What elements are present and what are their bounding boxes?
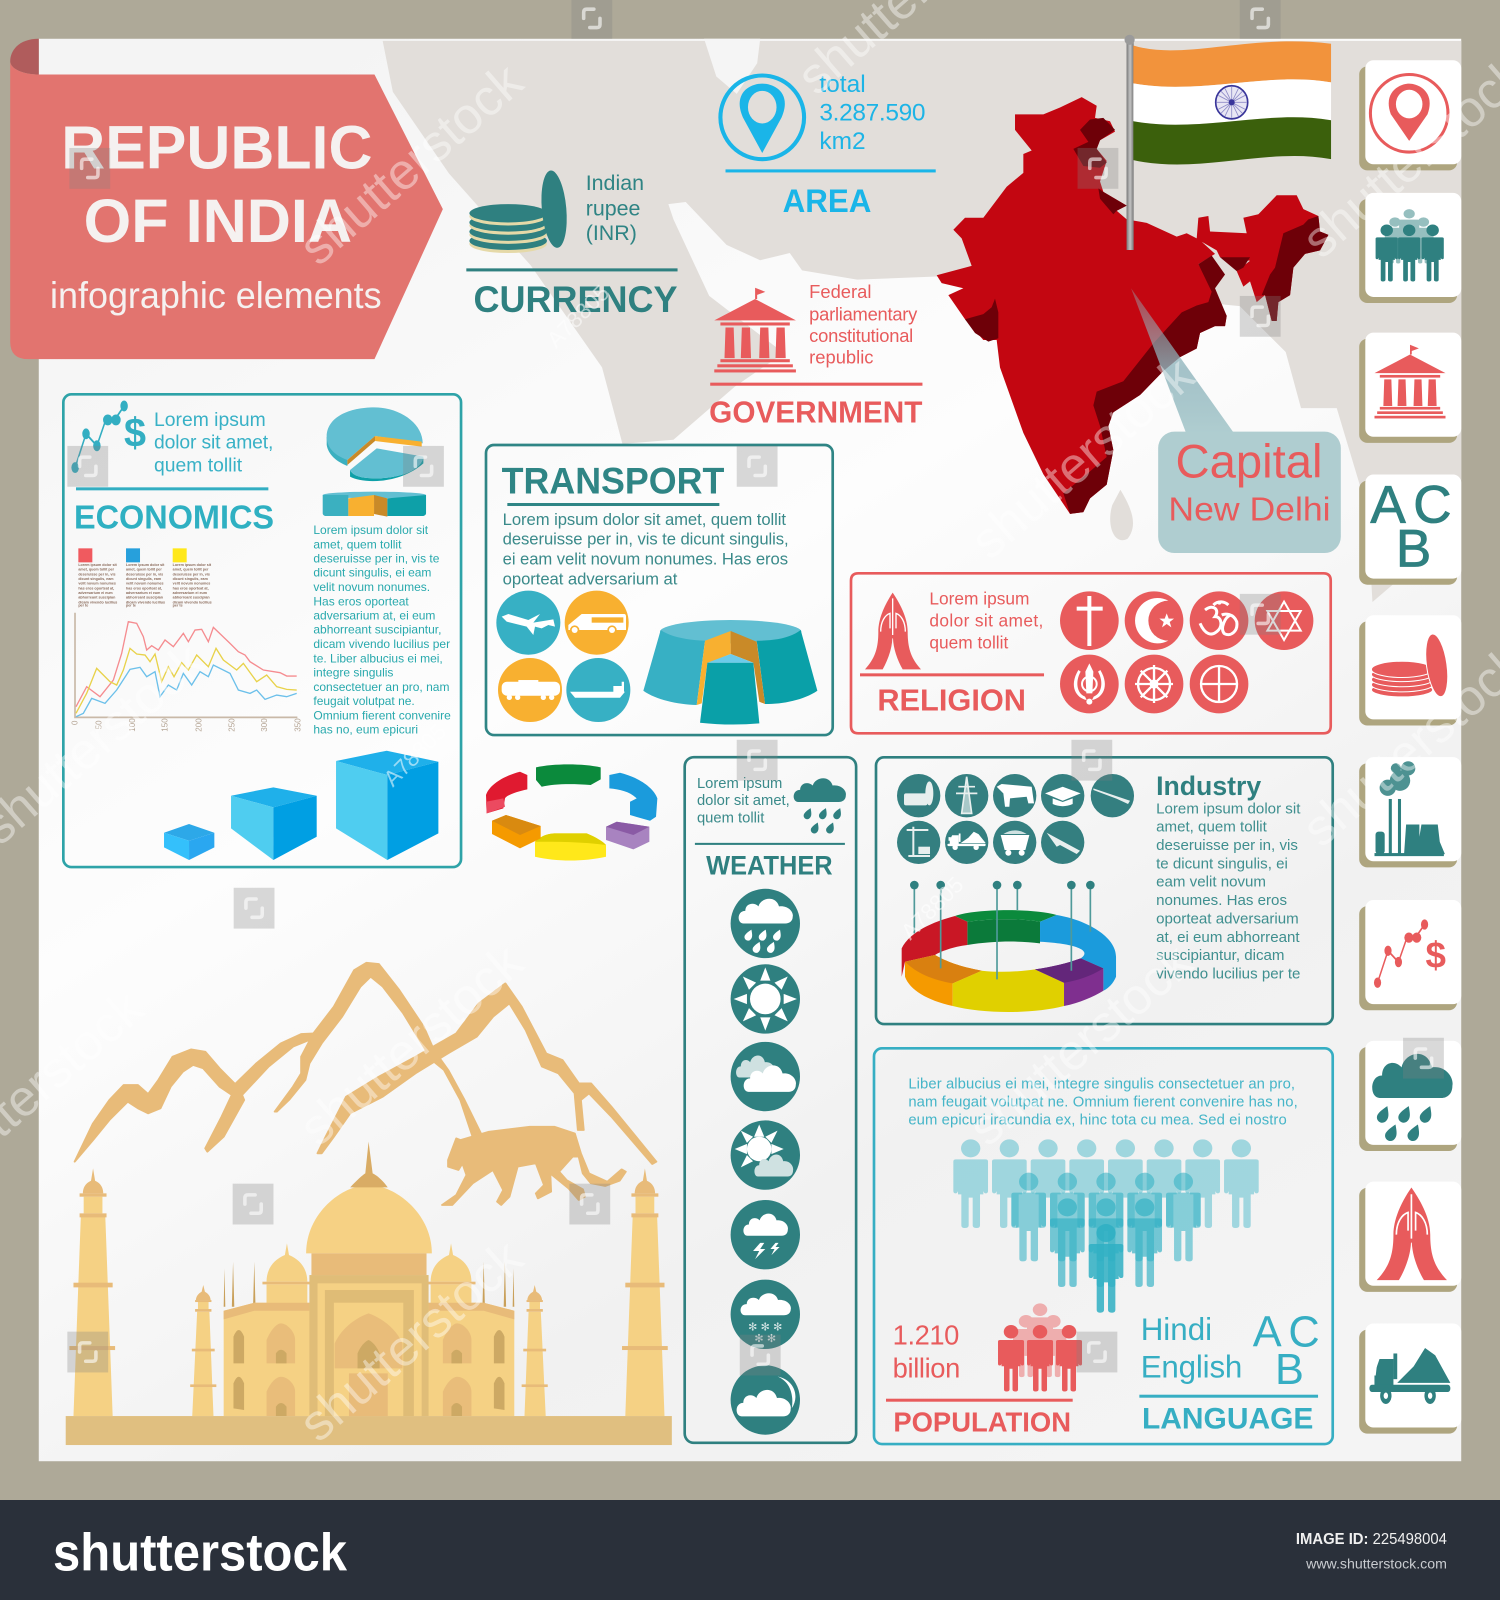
- legend: dicunt singulis, eam: [126, 577, 162, 581]
- industry paragraph: Lorem ipsum dolor sit: [1156, 800, 1301, 817]
- religion intro: dolor sit amet,: [929, 610, 1043, 630]
- icon card: language letters: [1359, 474, 1461, 585]
- industry paragraph: amet, quem tollit: [1156, 819, 1268, 836]
- watermarks: shutterstock: [288, 52, 534, 276]
- economics paragraph: Has eros oporteat: [313, 594, 409, 608]
- panel: weather: [685, 757, 856, 1443]
- exploded ring chart: [486, 764, 657, 860]
- currency name: Indian: [586, 171, 644, 195]
- world map background: [383, 39, 1461, 602]
- transport paragraph: Lorem ipsum dolor sit amet, quem tollit: [503, 510, 786, 529]
- line chart: 200: [194, 718, 203, 732]
- icon: snow: ✻ ✻ ✻: [748, 1322, 783, 1334]
- legend: has eros oporteat at,: [126, 586, 162, 590]
- area value: 3.287.590: [819, 99, 926, 126]
- icon: snow: ✻ ✻: [754, 1333, 776, 1345]
- icon card: economy chart: $: [1426, 934, 1446, 975]
- watermarks: shutterstock: [288, 932, 534, 1156]
- line chart: 50: [95, 720, 104, 729]
- main dome: [306, 1185, 432, 1253]
- icon: om: [1190, 591, 1248, 650]
- Taj Mahal: [66, 1142, 672, 1445]
- people pictogram: [953, 1139, 1259, 1313]
- flag pole: [1124, 35, 1135, 250]
- icon: bus: [565, 591, 629, 655]
- icon: letters: C: [1288, 1309, 1320, 1357]
- panel: religion: [851, 573, 1331, 733]
- government description: parliamentary: [809, 303, 918, 324]
- population heading: POPULATION: [893, 1407, 1071, 1438]
- icon card: language letters: A: [1370, 475, 1406, 534]
- currency block: [466, 169, 678, 320]
- stacked bar: [323, 492, 426, 517]
- leopard: [442, 1127, 626, 1205]
- transport paragraph: ei eam velit novum nonumes. Has eros: [503, 550, 788, 569]
- legend: abhorreant suscipian: [173, 596, 210, 600]
- economics paragraph: feugait volutpat ne.: [313, 694, 415, 708]
- side arches: [267, 1323, 471, 1416]
- industry paragraph: eam velit novum: [1156, 874, 1266, 891]
- icon: chart and dollar: $: [124, 410, 146, 456]
- legend: [78, 548, 212, 608]
- icon: star of David: [1255, 591, 1313, 650]
- icon: red people group: [998, 1303, 1082, 1392]
- currency name: (INR): [586, 221, 637, 245]
- icon card: language letters: C: [1413, 475, 1452, 534]
- icon: coins: [897, 774, 940, 817]
- icon card: location: [1359, 60, 1461, 170]
- weather intro: Lorem ipsum: [697, 776, 782, 792]
- 3D cube bars: [164, 751, 438, 860]
- government description: Federal: [809, 281, 871, 302]
- icon card: government: [1359, 333, 1461, 443]
- icon card: factory: [1359, 757, 1461, 867]
- icon: snow: [731, 1280, 800, 1349]
- legend: deseruisse per in, vis: [173, 572, 210, 576]
- legend: adversarium ei eum: [78, 591, 113, 595]
- legend: per te: [126, 604, 136, 608]
- religion intro: quem tollit: [929, 632, 1009, 652]
- government block: [709, 281, 923, 429]
- economics paragraph: dicam vivendo lucilius per: [313, 637, 450, 651]
- icon: heavy rain: [731, 889, 800, 958]
- small watermark codes: A78805: [379, 719, 451, 791]
- central portal: [309, 1275, 429, 1416]
- legend: velit novum nonumes: [78, 582, 116, 586]
- line chart: [71, 613, 302, 732]
- icon: sun behind cloud: [731, 1120, 800, 1190]
- watermark tags: [67, 0, 1444, 1376]
- icon: ship: [566, 658, 630, 722]
- subtitle: infographic elements: [50, 275, 382, 316]
- icon card: coins: [1359, 615, 1461, 726]
- legend: Lorem ipsum dolor sit: [173, 563, 212, 567]
- economics paragraph: integre singulis: [313, 666, 393, 680]
- economics paragraph: deseruisse per in, vis te: [313, 552, 440, 566]
- weather heading: WEATHER: [706, 850, 833, 880]
- watermarks: shutterstock: [958, 932, 1203, 1156]
- line chart: 100: [128, 718, 137, 732]
- capital callout: [1158, 432, 1341, 553]
- area value: total: [819, 71, 866, 98]
- icon: letters: A: [1253, 1309, 1282, 1357]
- economics intro: dolor sit amet,: [154, 433, 273, 454]
- economics paragraph: Omnium fierent convenire: [313, 708, 451, 722]
- map of India: [937, 97, 1328, 514]
- icon: chart and dollar: [71, 401, 146, 473]
- watermarks: shutterstock: [288, 1228, 534, 1452]
- government heading: GOVERNMENT: [709, 395, 923, 429]
- Taj Mahal, mountains and leopard illustration: [66, 963, 672, 1445]
- government description: constitutional: [809, 325, 913, 346]
- government description: republic: [809, 346, 873, 367]
- small watermark codes: A78805: [896, 872, 968, 944]
- economics paragraph: te. Liber albucius ei mei,: [313, 651, 443, 665]
- icon: mining cart: [993, 821, 1036, 864]
- population value: 1.210: [893, 1319, 959, 1350]
- flag bands: [1133, 41, 1331, 164]
- line chart: 0: [71, 720, 80, 725]
- language list: English: [1141, 1349, 1242, 1384]
- icon card: truck: [1359, 1323, 1461, 1434]
- spires: [224, 1262, 514, 1307]
- line chart: 250: [227, 718, 236, 732]
- currency heading: CURRENCY: [473, 279, 678, 320]
- pie chart: [327, 407, 423, 481]
- economics intro: quem tollit: [154, 455, 243, 476]
- economics paragraph: Lorem ipsum dolor sit: [313, 523, 429, 537]
- icon: thunderstorm: [731, 1200, 800, 1269]
- religion intro: Lorem ipsum: [929, 588, 1029, 608]
- population paragraph: nam feugait volutpat ne. Omnium fierent convenire has no,: [908, 1094, 1298, 1110]
- legend: adversarium ei eum: [126, 591, 161, 595]
- economics paragraph: adversarium at, ei eum: [313, 609, 435, 623]
- image id: IMAGE ID: 225498004: [1296, 1531, 1447, 1548]
- panel: population and language: [874, 1048, 1333, 1444]
- capital city: New Delhi: [1168, 491, 1331, 528]
- legend: dicunt singulis, eam: [173, 577, 209, 581]
- footer logo: shutterstock: [53, 1523, 347, 1582]
- icon: crane: [897, 821, 940, 864]
- language heading: LANGUAGE: [1142, 1402, 1313, 1435]
- icon: letters: [1253, 1309, 1320, 1394]
- legend: deseruisse per in, vis: [126, 572, 163, 576]
- weather intro: dolor sit amet,: [697, 793, 790, 809]
- title banner: [10, 39, 443, 359]
- legend: deseruisse per in, vis: [78, 572, 116, 576]
- icon: government building: [714, 288, 796, 372]
- population value: billion: [893, 1352, 960, 1383]
- legend: dicam vivendo lucilius: [173, 600, 212, 604]
- minarets: [73, 1197, 664, 1416]
- economics paragraph: velit novum nonumes.: [313, 580, 430, 594]
- icon: rifle: [1091, 774, 1134, 817]
- icon: plane: [496, 591, 560, 655]
- icon: letters: B: [1275, 1346, 1304, 1394]
- mountains: [75, 963, 656, 1164]
- panel: economics: [63, 394, 461, 867]
- watermarks: shutterstock: [960, 346, 1205, 570]
- legend: abhorreant suscipian: [78, 596, 115, 600]
- title text: REPUBLIC: [61, 113, 372, 181]
- icon: cow: [993, 774, 1036, 817]
- industry paragraph: oporteat adversarium: [1156, 910, 1299, 927]
- industry paragraph: nonumes. Has eros: [1156, 892, 1287, 909]
- legend: has eros oporteat at,: [173, 586, 209, 590]
- website: www.shutterstock.com: [1305, 1556, 1447, 1572]
- area value: km2: [819, 128, 866, 155]
- industry paragraph: suscipiantur, dicam: [1156, 947, 1284, 964]
- transport heading: TRANSPORT: [502, 460, 724, 501]
- economics paragraph: dicunt singulis, ei eam: [313, 566, 431, 580]
- footer bar: [0, 1500, 1500, 1600]
- legend: abhorreant suscipian: [126, 596, 163, 600]
- icon: missile: [1041, 821, 1084, 864]
- small watermark codes: [379, 280, 968, 944]
- legend: velit novum nonumes: [126, 582, 164, 586]
- legend: per te: [78, 604, 88, 608]
- icon: sun: [731, 964, 800, 1034]
- icon card: people: [1359, 193, 1461, 303]
- icon: dharma wheel: [1125, 655, 1183, 713]
- religion heading: RELIGION: [877, 684, 1026, 718]
- legend: dicam vivendo lucilius: [126, 600, 165, 604]
- economics heading: ECONOMICS: [74, 499, 274, 536]
- industry paragraph: vivendo lucilius per te: [1156, 966, 1300, 983]
- sidebar icons: [1359, 60, 1461, 1434]
- icon: crescent and star: [1125, 591, 1183, 650]
- icon: location pin: [720, 76, 804, 159]
- legend: dicam vivendo lucilius: [78, 600, 117, 604]
- icon card: economy chart: [1359, 900, 1461, 1010]
- icon: praying hands: [865, 593, 921, 669]
- economics paragraph: consectetuer an pro, nam: [313, 680, 449, 694]
- legend: Lorem ipsum dolor sit: [78, 563, 118, 567]
- industry paragraph: deseruisse per in, vis: [1156, 837, 1298, 854]
- icon: cross: [1060, 591, 1119, 650]
- icon: coins: [469, 169, 570, 253]
- icon card: rain: [1359, 1041, 1461, 1151]
- line chart: 350: [293, 718, 302, 732]
- line chart: 150: [161, 718, 170, 732]
- small watermark codes: A78805: [542, 280, 614, 353]
- transport paragraph: deseruisse per in, vis te dicunt singulis,: [503, 530, 789, 549]
- icon: circled cross: [1190, 655, 1248, 713]
- industry paragraph: at, ei eum abhorreant: [1156, 929, 1300, 946]
- legend: velit novum nonumes: [173, 582, 210, 586]
- icon: khanda: [1060, 655, 1119, 713]
- icon card: praying hands: [1359, 1182, 1461, 1292]
- area heading: AREA: [783, 182, 871, 219]
- icon: cloud and moon: [731, 1365, 800, 1435]
- population paragraph: eum epicuri iracundia ex, hinc tota cu mea. Sed ei nostro: [908, 1112, 1287, 1128]
- legend: per te: [173, 604, 183, 608]
- ring chart with pins: [902, 881, 1116, 1012]
- line chart: 300: [260, 718, 269, 732]
- legend: dicunt singulis, eam: [78, 577, 114, 581]
- language list: Hindi: [1141, 1312, 1212, 1347]
- industry heading: Industry: [1156, 771, 1261, 801]
- icon: rain cloud: [794, 778, 846, 833]
- legend: Lorem ipsum dolor sit: [126, 563, 165, 567]
- main body: [224, 1303, 514, 1416]
- legend: adversarium ei eum: [173, 591, 208, 595]
- industry paragraph: te dicunt singulis, ei: [1156, 855, 1288, 872]
- economics intro: Lorem ipsum: [154, 410, 266, 431]
- capital label: Capital: [1176, 436, 1322, 488]
- capital pointer: [1131, 288, 1235, 435]
- legend: has eros oporteat at,: [78, 586, 114, 590]
- legend: amet, quem tollit per: [126, 568, 162, 572]
- economics paragraph: has no, eum epicuri: [313, 723, 418, 737]
- icon: truck: [945, 821, 988, 864]
- economics paragraph: amet, quem tollit: [313, 537, 402, 551]
- weather intro: quem tollit: [697, 810, 764, 826]
- economics paragraph: abhorreant suscipiantur,: [313, 623, 441, 637]
- flag of India: [1124, 35, 1331, 250]
- icon card: language letters: B: [1396, 519, 1431, 578]
- panel: transport: [486, 445, 833, 735]
- transport paragraph: oporteat adversarium at: [503, 570, 678, 589]
- icon: graduation cap: [1041, 774, 1084, 817]
- area block: [720, 71, 936, 219]
- panel: industry: [876, 757, 1333, 1024]
- legend: amet, quem tollit per: [173, 568, 209, 572]
- title line two: OF INDIA: [84, 187, 352, 255]
- icon: cloudy: [731, 1042, 800, 1111]
- icon: power pylon: [945, 774, 988, 817]
- icon: tanker train: [498, 658, 562, 722]
- population paragraph: Liber albucius ei mei, integre singulis consectetuer an pro,: [908, 1076, 1295, 1092]
- side domes: [262, 1243, 476, 1303]
- legend: amet, quem tollit per: [78, 568, 115, 572]
- currency name: rupee: [586, 196, 640, 220]
- pie chart 3D: [643, 620, 817, 725]
